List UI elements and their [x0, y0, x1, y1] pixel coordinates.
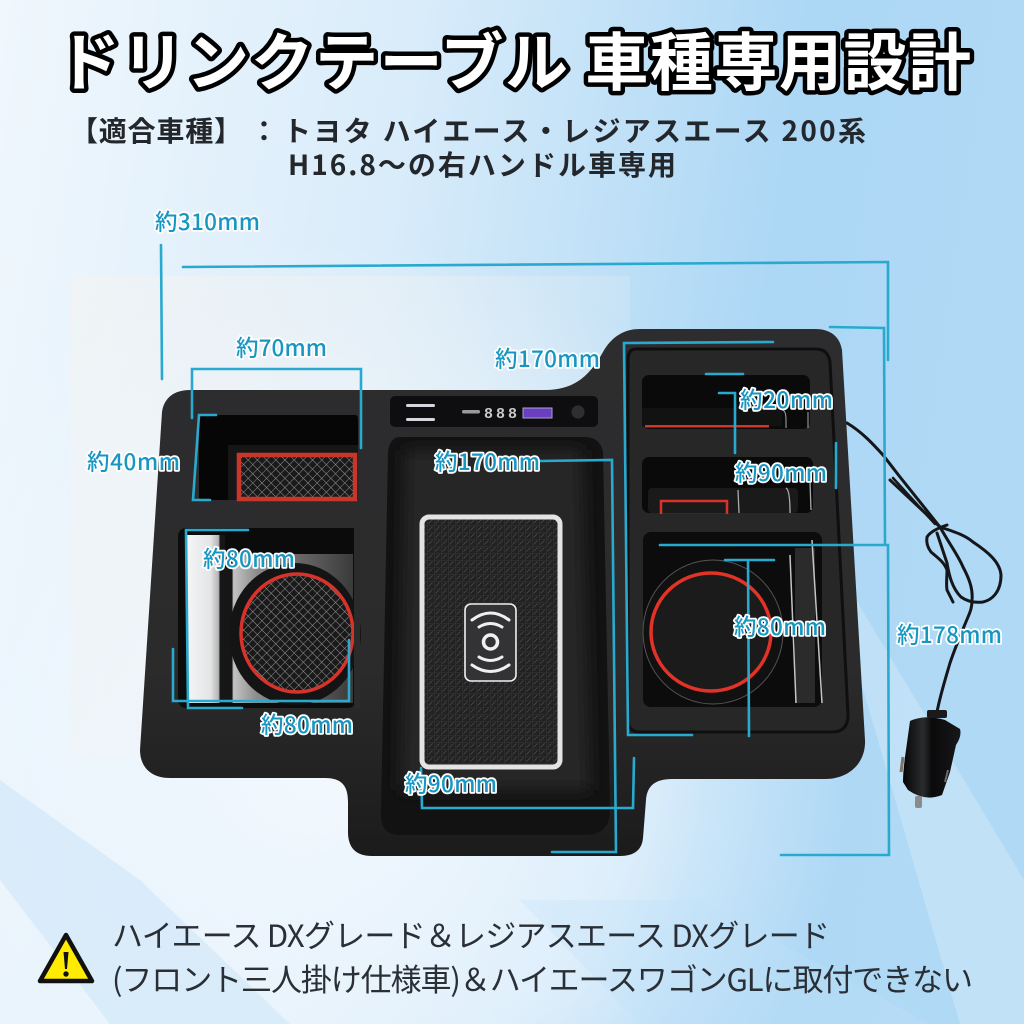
label: tray 170mm: 約170mm	[435, 445, 540, 477]
overall width left tick	[161, 245, 162, 379]
console body	[140, 329, 865, 856]
red ring coaster	[651, 573, 771, 691]
middle slot	[640, 457, 820, 519]
usb port	[523, 408, 552, 418]
dimension lines	[161, 245, 889, 855]
right recessed tray	[628, 349, 848, 732]
label: upper 170mm: 約170mm	[495, 342, 600, 374]
top slot	[642, 375, 810, 429]
warning line 2: (フロント三人掛け仕様車)＆ハイエースワゴンGLに取付できない	[112, 955, 973, 1000]
car charger plug	[901, 710, 960, 808]
label: 20mm: 約20mm	[740, 383, 833, 415]
compatibility label: 【適合車種】	[70, 110, 242, 150]
label: right 80mm: 約80mm	[734, 610, 826, 642]
label: 70mm: 約70mm	[236, 331, 327, 363]
label: lower left 80mm: 約80mm	[261, 708, 353, 740]
label: 40mm: 約40mm	[87, 445, 180, 477]
20mm bracket	[719, 393, 735, 453]
charging pad	[422, 517, 560, 767]
label: right 90mm: 約90mm	[735, 456, 827, 488]
bottom cup slot	[643, 532, 822, 707]
label: 178mm: 約178mm	[897, 618, 1002, 650]
right 90mm tick	[835, 443, 837, 488]
left top storage compartment	[199, 415, 358, 500]
icon: warning triangle	[40, 935, 92, 981]
overall width bracket	[183, 262, 888, 360]
warning note	[112, 911, 973, 1000]
compatibility colon: ：	[250, 110, 278, 150]
micro usb port	[462, 410, 480, 414]
left cup width bracket	[186, 530, 248, 708]
digital display: 888	[484, 406, 517, 423]
red ring coaster	[241, 574, 353, 692]
red rectangular mat	[239, 455, 355, 499]
wireless charging tray	[381, 437, 610, 835]
70mm bracket	[192, 369, 361, 448]
right 80mm bracket	[725, 560, 774, 736]
warning line 1: ハイエース DXグレード＆レジアスエース DXグレード	[112, 911, 830, 956]
power socket	[571, 405, 585, 419]
dimension labels	[87, 205, 1002, 799]
left cup holder	[178, 528, 361, 708]
title: ドリンクテーブル 車種専用設計	[57, 13, 971, 104]
left cup depth bracket	[173, 640, 349, 701]
label: tray 90mm: 約90mm	[405, 767, 497, 799]
icon: wireless charging	[465, 604, 516, 681]
20mm tick	[706, 373, 743, 375]
control panel	[390, 396, 598, 427]
center tray 170mm bracket	[540, 460, 616, 852]
cable	[847, 423, 1001, 712]
center tray 90mm bracket	[421, 758, 634, 808]
label: left cup 80mm: 約80mm	[203, 542, 295, 574]
compatibility line 1: トヨタ ハイエース・レジアスエース 200系	[283, 110, 866, 150]
button dashes	[406, 404, 435, 421]
178mm bracket	[660, 327, 889, 855]
compatible vehicle text	[70, 110, 866, 184]
compatibility line 2: H16.8～の右ハンドル車専用	[288, 144, 676, 184]
label: 310mm: 約310mm	[155, 205, 260, 237]
right tray 170mm bracket	[624, 342, 773, 735]
40mm bracket	[193, 415, 216, 500]
